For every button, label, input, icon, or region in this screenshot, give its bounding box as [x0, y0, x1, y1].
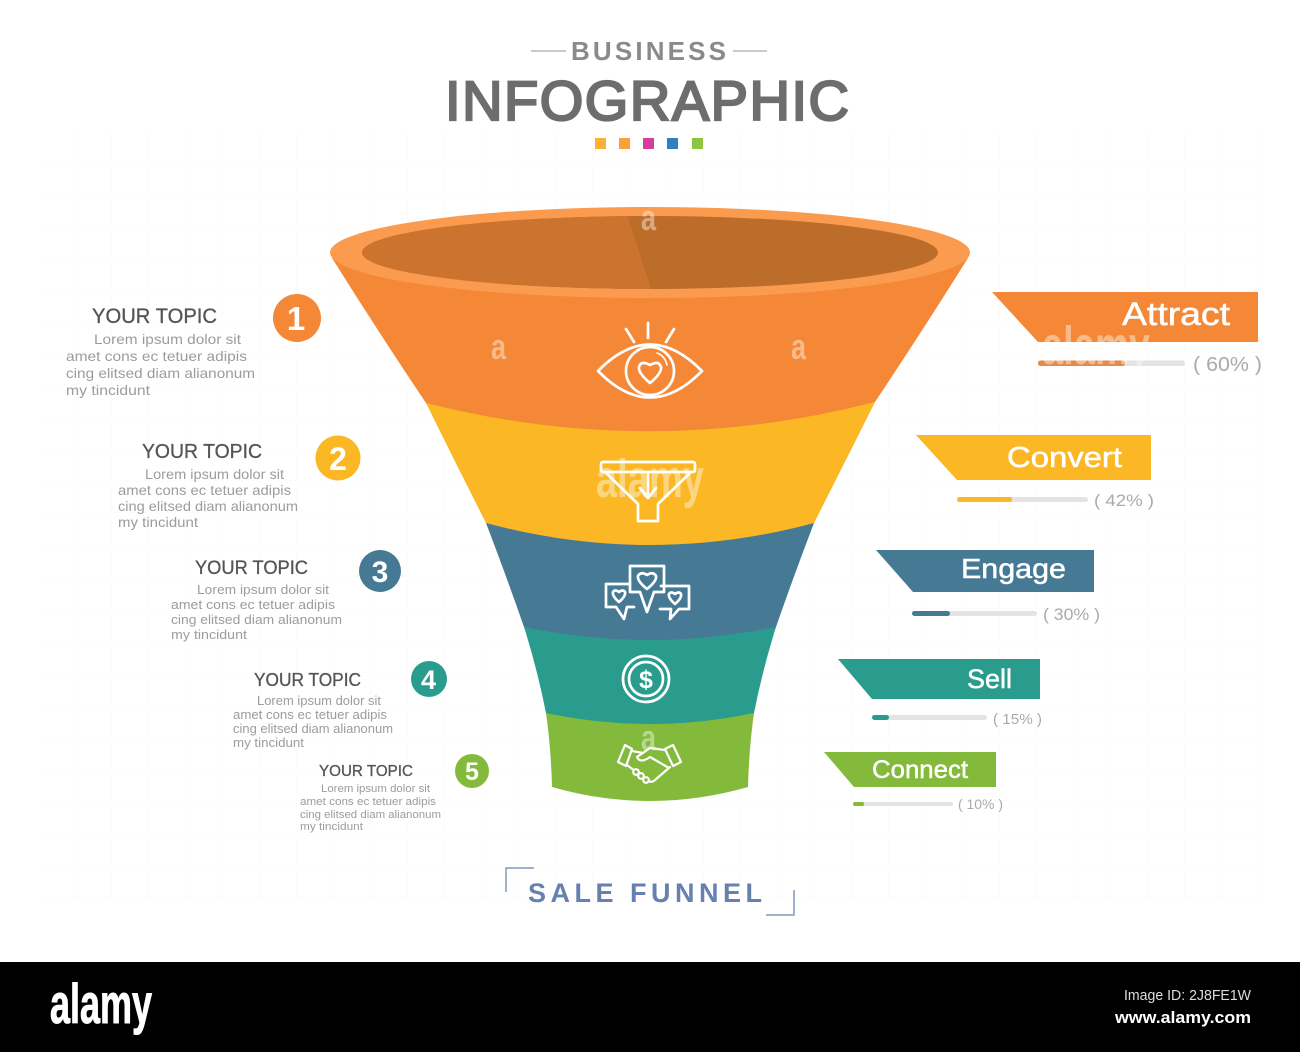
- progress bar: 30%: [912, 611, 1037, 616]
- progress bar: 42%: [957, 497, 1088, 502]
- label: connect: Connect: [872, 756, 968, 784]
- topic 5: Lorem ipsum dolor sit: [321, 783, 430, 795]
- band 5: green: [546, 713, 754, 801]
- number badge 3: [359, 550, 401, 592]
- funnel rim: [330, 207, 970, 298]
- footer bar: [0, 962, 1300, 1052]
- image id: Image ID: 2J8FE1W: [1124, 987, 1252, 1004]
- label: convert: [916, 435, 1154, 510]
- topic 1: amet cons ec tetuer adipis: [66, 348, 247, 364]
- watermarks: a: [491, 326, 507, 367]
- section title: sale funnel: SALE FUNNEL: [528, 878, 762, 908]
- label: attract: [992, 292, 1262, 376]
- topic 2: my tincidunt: [118, 514, 198, 530]
- topic 4: amet cons ec tetuer adipis: [233, 708, 387, 722]
- band 2: yellow: [426, 402, 875, 545]
- watermarks: alamy: [596, 449, 704, 509]
- label: connect: [824, 752, 1003, 812]
- section title: sale funnel: [506, 868, 794, 915]
- number badge 2: [316, 436, 360, 480]
- number badge 1: [273, 294, 321, 342]
- topic 3: amet cons ec tetuer adipis: [171, 597, 336, 612]
- watermarks: a: [791, 326, 807, 367]
- label: convert: ( 42% ): [1094, 491, 1154, 510]
- icon: filter funnel: [601, 462, 695, 521]
- topic 1: cing elitsed diam alianonum: [66, 365, 255, 381]
- watermarks: a: [641, 197, 657, 238]
- topic 3: my tincidunt: [171, 627, 247, 642]
- label: sell: Sell: [967, 664, 1012, 694]
- label: attract: Attract: [1122, 296, 1230, 332]
- topic 1: my tincidunt: [66, 382, 150, 398]
- label: engage: [876, 550, 1100, 624]
- progress bar: 15%: [872, 715, 987, 720]
- topic 2: YOUR TOPIC: [142, 441, 262, 463]
- icon: dollar coin: [623, 656, 669, 702]
- topic 1: Lorem ipsum dolor sit: [94, 331, 241, 347]
- funnel inner opening: [362, 216, 938, 289]
- topic 2: cing elitsed diam alianonum: [118, 498, 298, 514]
- topic 5: my tincidunt: [300, 821, 363, 833]
- topic 2: Lorem ipsum dolor sit: [145, 466, 284, 482]
- band 1: orange: [332, 258, 968, 431]
- topic 2: [118, 436, 360, 530]
- topic 5: cing elitsed diam alianonum: [300, 809, 441, 821]
- icon: handshake: [618, 745, 681, 783]
- label: convert: Convert: [1007, 442, 1122, 474]
- topic 5: YOUR TOPIC: [319, 763, 413, 780]
- label: attract: ( 60% ): [1193, 354, 1262, 376]
- topic 4: my tincidunt: [233, 736, 305, 750]
- topic 4: cing elitsed diam alianonum: [233, 722, 393, 736]
- topic 3: Lorem ipsum dolor sit: [197, 582, 329, 597]
- number badge 5: 5: [465, 758, 479, 786]
- topic 3: [171, 550, 401, 642]
- icon: eye with heart: [598, 323, 702, 398]
- number badge 2: 2: [329, 441, 347, 477]
- topic 4: Lorem ipsum dolor sit: [257, 694, 382, 708]
- website: www.alamy.com: [1114, 1008, 1251, 1027]
- topic 4: YOUR TOPIC: [254, 670, 361, 690]
- title: INFOGRAPHIC: [445, 69, 849, 132]
- watermarks: [491, 197, 807, 758]
- number badge 4: 4: [421, 665, 436, 695]
- number badge 4: [411, 661, 447, 697]
- band 3: blue: [486, 523, 814, 640]
- colour squares: [595, 138, 703, 149]
- topic 1: YOUR TOPIC: [92, 305, 217, 328]
- topic 3: cing elitsed diam alianonum: [171, 612, 342, 627]
- topic 5: amet cons ec tetuer adipis: [300, 796, 437, 808]
- funnel: [330, 207, 970, 801]
- topic 3: YOUR TOPIC: [195, 558, 308, 579]
- watermarks: a: [641, 717, 657, 758]
- label: sell: ( 15% ): [993, 711, 1042, 728]
- label: engage: ( 30% ): [1043, 605, 1100, 624]
- number badge 5: [455, 754, 489, 788]
- label: engage: Engage: [961, 553, 1066, 584]
- title: BUSINESS: [571, 36, 726, 66]
- icon: speech bubbles with hearts: [606, 566, 689, 619]
- icon: dollar coin: $: [639, 666, 653, 694]
- band 4: teal: [524, 627, 776, 724]
- alamy logo: alamy: [50, 972, 152, 1035]
- progress bar: 60%: [1038, 360, 1185, 366]
- topic 1: [66, 294, 321, 398]
- number badge 3: 3: [372, 556, 388, 589]
- progress bar: 10%: [853, 802, 953, 806]
- label: attract: alamy: [1042, 316, 1150, 376]
- title: [445, 36, 849, 132]
- topic 5: [300, 754, 489, 833]
- number badge 1: 1: [287, 300, 305, 337]
- label: sell: [838, 659, 1042, 728]
- topic 2: amet cons ec tetuer adipis: [118, 482, 291, 498]
- topic 4: [233, 661, 447, 750]
- label: connect: ( 10% ): [958, 796, 1003, 812]
